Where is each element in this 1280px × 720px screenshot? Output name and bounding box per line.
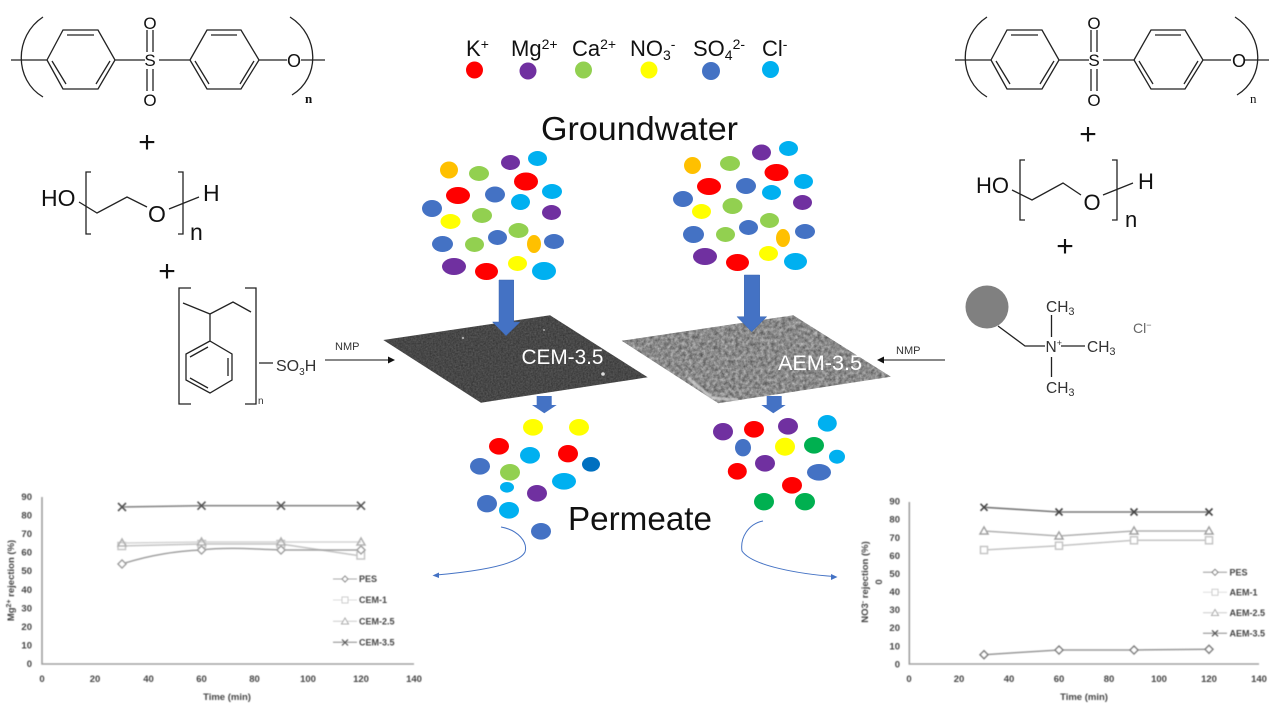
heading: Groundwater: Groundwater <box>541 110 738 147</box>
arrow: feed through AEM membrane <box>737 275 767 332</box>
quaternary ammonium functional group: 3 <box>1068 387 1075 399</box>
x axis tick labels: 20 <box>954 674 964 685</box>
arrow: feed through CEM membrane <box>492 280 520 336</box>
x axis tick labels: 0 <box>906 674 912 685</box>
legend item: potassium: K <box>466 36 481 61</box>
legend item: chloride: - <box>783 36 788 52</box>
legend: AEM-2.5: AEM-2.5 <box>1230 608 1265 618</box>
polyethersulfone structure left: O <box>143 14 157 33</box>
y axis tick labels: 20 <box>889 623 900 634</box>
polyethersulfone structure left: O <box>143 91 157 110</box>
y axis tick labels: 10 <box>889 642 900 652</box>
legend item: sulfate <box>693 36 745 80</box>
quaternary ammonium functional group: 3 <box>1109 346 1116 358</box>
sulfonated polystyrene structure <box>179 288 316 407</box>
sulfonated polystyrene structure: n <box>258 396 264 407</box>
polyethersulfone structure right <box>955 14 1269 110</box>
y axis tick labels: 0 <box>27 659 32 670</box>
legend item: potassium <box>466 36 489 78</box>
chart: NO3- rejection vs time <box>860 496 1267 703</box>
series: CEM-1 <box>118 540 364 559</box>
arrow: NMP into AEM membrane: NMP <box>896 345 920 357</box>
plus sign: + <box>158 255 176 288</box>
arrow: CEM to permeate <box>532 396 557 413</box>
sulfonated polystyrene structure: SO <box>276 358 299 375</box>
plus sign: + <box>1056 230 1074 263</box>
series: AEM-3.5 <box>980 504 1212 516</box>
curved arrow: left permeate to chart <box>432 527 526 578</box>
arrow: NMP into CEM membrane <box>325 341 395 364</box>
polyethersulfone structure right: O <box>1087 91 1101 110</box>
x axis tick labels: 140 <box>406 674 422 685</box>
x axis tick labels: 60 <box>1054 674 1064 685</box>
legend: PES: PES <box>1230 568 1248 578</box>
quaternary ammonium functional group <box>966 286 1152 399</box>
series: AEM-1 <box>980 537 1212 554</box>
x axis title: Time (min) <box>203 692 251 703</box>
panel: right polymer structures <box>877 14 1269 399</box>
polyethylene glycol structure right <box>976 160 1154 232</box>
legend item: sulfate: 2- <box>733 36 745 52</box>
legend item: calcium: Ca <box>572 36 600 61</box>
panel: left polymer structures <box>11 14 395 407</box>
legend: AEM-3.5: AEM-3.5 <box>1230 628 1265 638</box>
legend: CEM-3.5: CEM-3.5 <box>359 638 395 648</box>
x axis tick labels: 140 <box>1251 674 1267 685</box>
sulfonated polystyrene structure: 3 <box>299 367 305 378</box>
polyethylene glycol structure left: H <box>203 180 220 206</box>
y axis tick labels: 50 <box>889 569 900 580</box>
x axis tick labels <box>906 674 1267 685</box>
ion cluster: groundwater feed left <box>422 151 564 280</box>
legend: PES: PES <box>359 574 377 584</box>
arrow: NMP into CEM membrane: NMP <box>335 341 359 353</box>
legend item: chloride: Cl <box>762 36 783 61</box>
y axis tick labels <box>21 492 32 670</box>
legend item: calcium: 2+ <box>600 36 616 52</box>
y axis tick labels: 50 <box>21 566 32 577</box>
quaternary ammonium functional group: + <box>1057 338 1062 348</box>
legend item: magnesium: Mg <box>511 36 542 61</box>
y axis tick labels: 70 <box>889 533 900 544</box>
x axis tick labels: 120 <box>353 674 369 685</box>
plus sign: + <box>138 126 156 159</box>
y axis tick labels: 0 <box>895 660 900 670</box>
y axis tick labels: 40 <box>889 587 900 598</box>
quaternary ammonium functional group: − <box>1146 320 1152 330</box>
polyethersulfone structure right: n <box>1250 91 1257 106</box>
legend item: nitrate: - <box>671 36 676 52</box>
chart: Mg2+ rejection vs time <box>6 492 422 703</box>
ion cluster: permeate right <box>713 415 845 510</box>
membrane: AEM-3.5: AEM-3.5 <box>778 352 862 375</box>
polyethersulfone structure left: O <box>287 51 301 71</box>
plus sign: + <box>1079 118 1097 151</box>
y axis tick labels: 20 <box>21 622 32 633</box>
polyethylene glycol structure left: HO <box>41 185 76 211</box>
x axis tick labels <box>39 674 422 685</box>
y axis tick labels: 30 <box>889 605 900 616</box>
x axis tick labels: 100 <box>1151 674 1167 685</box>
legend item: sulfate: SO <box>693 36 725 61</box>
polyethersulfone structure right: O <box>1232 51 1246 71</box>
series: PES <box>118 546 365 568</box>
polyethersulfone structure right: S <box>1088 51 1100 70</box>
curved arrow: right permeate to chart <box>742 521 838 580</box>
quaternary ammonium functional group: 3 <box>1068 306 1075 318</box>
y axis tick labels: 90 <box>21 492 32 503</box>
membrane: CEM-3.5: CEM-3.5 <box>522 346 604 369</box>
x axis tick labels: 120 <box>1201 674 1217 685</box>
arrow: NMP into AEM membrane <box>877 345 945 364</box>
series: CEM-3.5 <box>118 502 365 511</box>
membrane: AEM-3.5 <box>622 315 891 403</box>
quaternary ammonium functional group: Cl <box>1133 320 1146 336</box>
y axis title: NO3 <box>860 603 871 623</box>
membrane: CEM-3.5 <box>383 315 648 403</box>
legend: AEM-1: AEM-1 <box>1230 588 1258 598</box>
y axis tick labels: 60 <box>21 548 32 558</box>
quaternary ammonium functional group: CH <box>1046 380 1068 397</box>
y axis tick labels: 80 <box>889 514 900 526</box>
y axis tick labels: 90 <box>889 496 900 508</box>
legend: ions <box>466 36 788 80</box>
heading: Permeate: Permeate <box>568 500 712 537</box>
polyethersulfone structure left: n <box>305 91 313 106</box>
quaternary ammonium functional group: N <box>1046 339 1057 356</box>
polyethersulfone structure right: O <box>1087 14 1101 33</box>
x axis tick labels: 40 <box>143 674 154 685</box>
y axis title: rejection (%) <box>6 540 17 599</box>
legend: CEM-2.5: CEM-2.5 <box>359 616 395 626</box>
chart axes <box>42 497 414 664</box>
x axis tick labels: 100 <box>300 674 316 685</box>
ion cluster: groundwater feed right <box>673 141 815 271</box>
x axis tick labels: 40 <box>1004 674 1014 685</box>
polyethylene glycol structure left: n <box>190 219 203 245</box>
x axis tick labels: 80 <box>1104 674 1114 685</box>
y axis tick labels: 10 <box>21 640 32 652</box>
legend item: magnesium: 2+ <box>542 36 558 52</box>
y axis tick labels <box>889 496 900 670</box>
legend item: nitrate: NO <box>630 36 663 61</box>
polyethersulfone structure left <box>11 14 325 110</box>
legend item: magnesium <box>511 36 558 80</box>
stray axis zero label: 0 <box>874 579 885 585</box>
series: AEM-2.5 <box>980 527 1213 539</box>
y axis title: - <box>860 600 867 603</box>
legend item: chloride <box>762 36 788 78</box>
chart legend <box>333 574 395 648</box>
polyethersulfone structure left: S <box>144 51 156 70</box>
legend item: sulfate: 4 <box>725 47 733 63</box>
sulfonated polystyrene structure: H <box>305 358 316 375</box>
y axis title: rejection (%) <box>860 541 871 601</box>
polyethylene glycol structure right: O <box>1083 190 1101 215</box>
quaternary ammonium functional group: CH <box>1087 339 1109 356</box>
y axis tick labels: 30 <box>21 604 32 614</box>
y axis title: 2+ <box>6 599 13 607</box>
arrow: AEM to permeate <box>761 396 786 413</box>
x axis tick labels: 0 <box>39 674 45 685</box>
polyethylene glycol structure left: O <box>148 201 166 227</box>
y axis tick labels: 60 <box>889 551 900 562</box>
polyethylene glycol structure left <box>41 172 220 245</box>
polyethylene glycol structure right: n <box>1125 207 1137 232</box>
legend item: potassium: + <box>481 36 489 52</box>
legend: CEM-1: CEM-1 <box>359 595 387 605</box>
chart axes <box>909 502 1259 664</box>
legend item: calcium <box>572 36 616 78</box>
polyethylene glycol structure right: HO <box>976 173 1009 198</box>
x axis tick labels: 20 <box>90 674 100 685</box>
series: PES <box>980 645 1213 659</box>
quaternary ammonium functional group: CH <box>1046 299 1068 316</box>
legend item: nitrate <box>630 36 676 78</box>
legend item: nitrate: 3 <box>663 47 671 63</box>
y axis tick labels: 70 <box>21 529 32 540</box>
y axis tick labels: 40 <box>21 585 32 596</box>
series: CEM-2.5 <box>118 538 365 546</box>
x axis title: Time (min) <box>1060 692 1108 703</box>
polyethylene glycol structure right: H <box>1138 169 1154 194</box>
y axis title: Mg <box>6 607 17 621</box>
y axis tick labels: 80 <box>21 510 32 522</box>
chart legend <box>1203 568 1265 638</box>
x axis tick labels: 60 <box>196 674 207 685</box>
ion cluster: permeate left <box>470 419 600 540</box>
x axis tick labels: 80 <box>249 674 260 685</box>
